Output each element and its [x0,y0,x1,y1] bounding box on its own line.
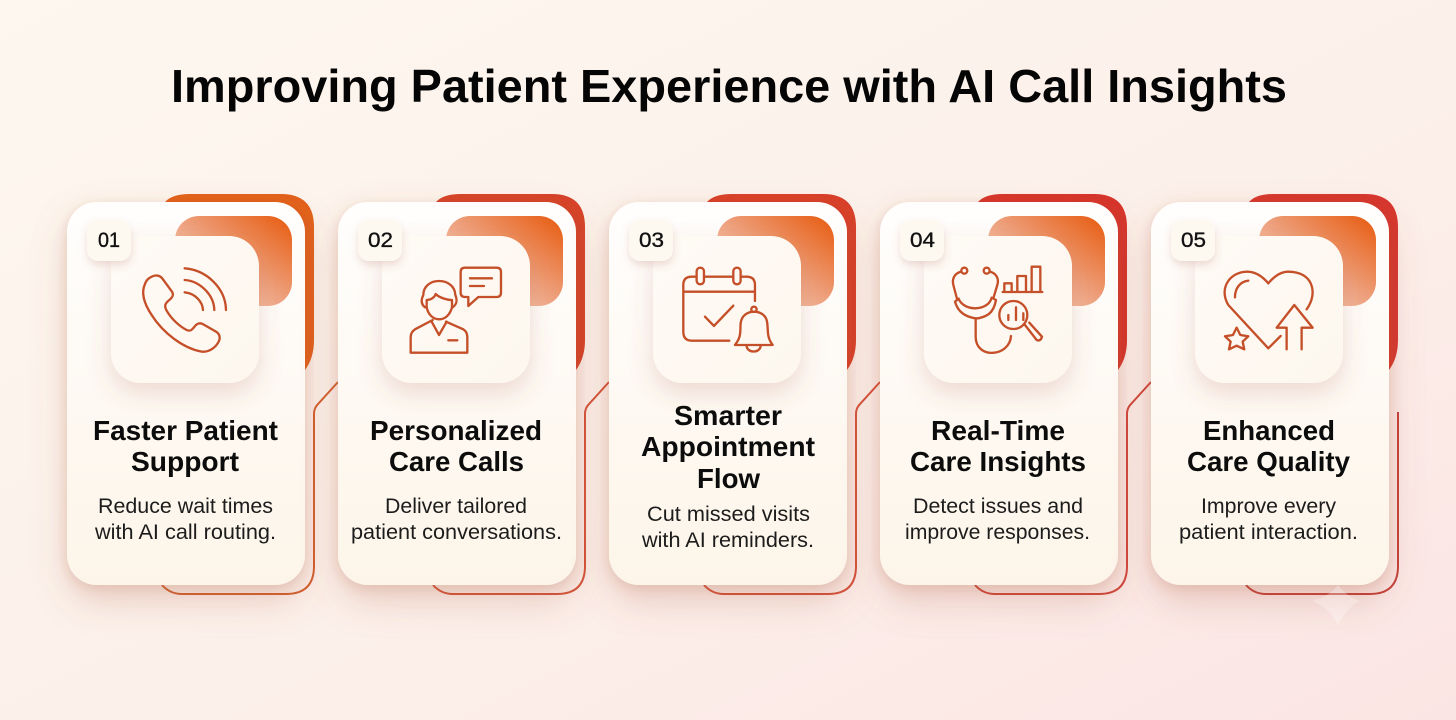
heading: Real-Time [931,415,1065,446]
icon tile: agent with speech bubble [382,236,530,383]
description: Reduce wait times [98,495,273,518]
panel: card 03 [609,194,880,594]
badge 01 [87,220,131,261]
heading: Flow [697,463,760,494]
badge 03 [629,220,673,261]
badge 01: 01 [98,229,120,252]
description: Deliver tailored [385,495,527,518]
panel: card 05 [1151,194,1398,594]
description: patient conversations. [351,521,562,544]
badge 05: 05 [1181,229,1206,252]
panel: card 04 [880,194,1151,594]
badge 02 [358,220,402,261]
heading: Care Calls [389,446,524,477]
badge 04: 04 [910,229,935,252]
icon tile: calendar and bell [653,236,801,383]
description: Cut missed visits [647,503,810,526]
heading: Support [131,446,239,477]
description: patient interaction. [1179,521,1358,544]
description: Detect issues and [913,495,1083,518]
heading: Smarter [674,400,782,431]
badge 04 [900,220,944,261]
icon tile: heart, star and arrow [1195,236,1343,383]
title: Improving Patient Experience with AI Call Insights [171,60,1287,112]
icon: sparkle [1312,585,1360,625]
badge 05 [1171,220,1215,261]
icon tile: stethoscope and analytics [924,236,1072,383]
badge 03: 03 [639,229,664,252]
heading: Faster Patient [93,415,278,446]
heading: Care Insights [910,446,1086,477]
description: Improve every [1201,495,1337,518]
heading: Appointment [641,431,815,462]
icon tile: phone [111,236,259,383]
panel: card 01 [67,194,338,594]
heading: Care Quality [1187,446,1350,477]
panel: card 02 [338,194,609,594]
description: with AI call routing. [94,521,276,544]
badge 02: 02 [368,229,393,252]
description: improve responses. [905,521,1090,544]
heading: Enhanced [1203,415,1335,446]
heading: Personalized [370,415,542,446]
description: with AI reminders. [641,529,814,552]
